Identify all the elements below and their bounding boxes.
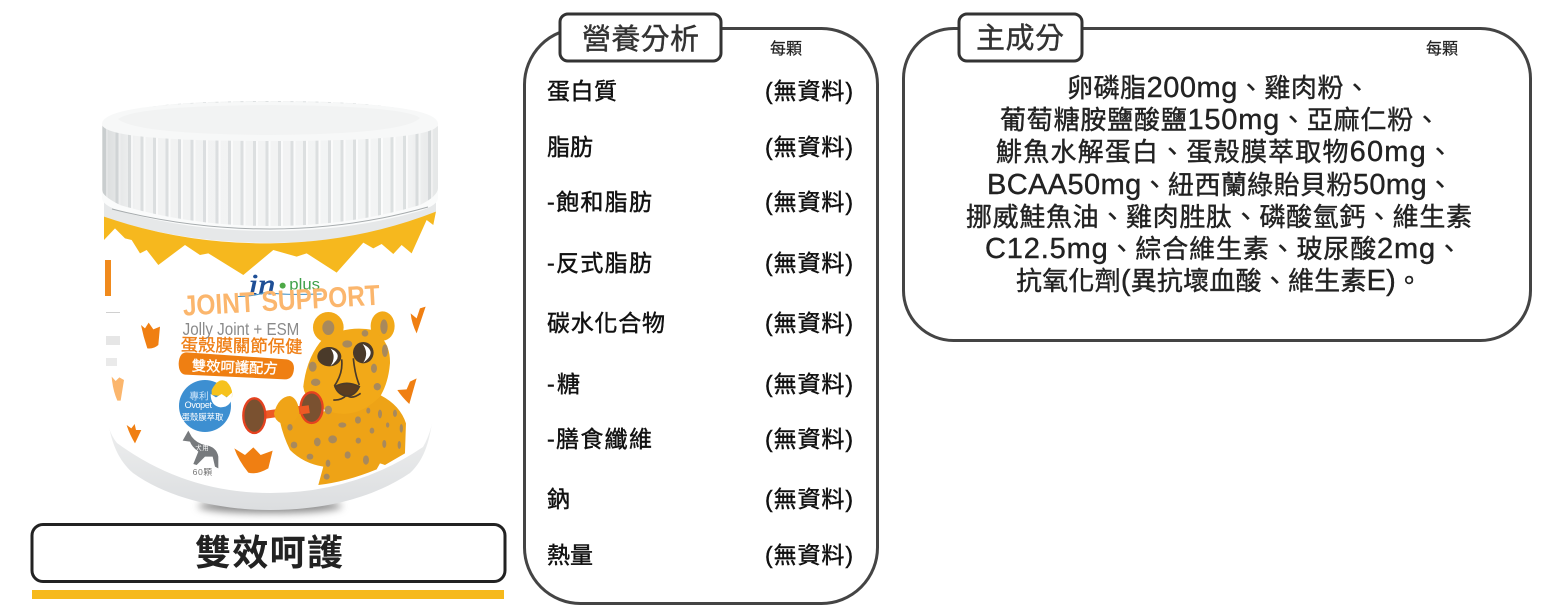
orange crown shapes bbox=[112, 307, 426, 473]
row: protein: 蛋白質 bbox=[547, 78, 617, 104]
dog icon: 犬用 bbox=[195, 443, 209, 452]
leopard hand bbox=[274, 396, 299, 424]
leopard body and arm bbox=[280, 395, 406, 485]
dumbbell bbox=[243, 392, 323, 433]
ingredient list: 挪威鮭魚油、雞肉胜肽、磷酸氫鈣、維生素 bbox=[966, 202, 1472, 232]
row: calories: (無資料) bbox=[765, 542, 853, 568]
patent badge: Ovopet bbox=[185, 400, 212, 410]
panel border bbox=[904, 28, 1530, 340]
ingredient list: 葡萄糖胺鹽酸鹽150mg、亞麻仁粉、 bbox=[1000, 104, 1440, 136]
orange pill bbox=[179, 352, 294, 379]
patent badge: 專利 bbox=[189, 390, 209, 402]
ingredient list bbox=[966, 72, 1472, 297]
row: calories: 熱量 bbox=[547, 542, 593, 568]
ingredient list: BCAA50mg、紐西蘭綠貽貝粉50mg、 bbox=[987, 169, 1453, 201]
jar shadow bbox=[198, 499, 342, 513]
dog icon bbox=[183, 431, 218, 468]
heading box bbox=[32, 524, 505, 582]
subtitle: Jolly Joint + ESM bbox=[183, 319, 299, 339]
row: trans fat: (無資料) bbox=[765, 250, 853, 276]
leopard ears bbox=[313, 311, 395, 343]
row: carbohydrate bbox=[547, 310, 853, 336]
row: sodium bbox=[547, 486, 853, 512]
brand logo bbox=[235, 270, 322, 301]
product name: JOINT SUPPORT bbox=[182, 280, 381, 323]
pack count: 60顆 bbox=[193, 467, 212, 477]
row: protein: (無資料) bbox=[765, 78, 853, 104]
heading: product name bbox=[32, 524, 505, 582]
panel border bbox=[524, 28, 878, 604]
row: saturated fat bbox=[547, 189, 853, 215]
patent badge bbox=[179, 380, 232, 432]
row: fat bbox=[547, 134, 853, 160]
jar base rim bbox=[106, 400, 434, 510]
jar lid bbox=[102, 101, 438, 231]
row: dietary fiber: -膳食纖維 bbox=[547, 426, 652, 452]
leopard mascot bbox=[243, 311, 406, 485]
brand logo: plus bbox=[289, 276, 320, 293]
row: sugar: -糖 bbox=[547, 371, 580, 397]
row: sugar: (無資料) bbox=[765, 371, 853, 397]
jar neck bbox=[104, 200, 436, 243]
row: dietary fiber: (無資料) bbox=[765, 426, 853, 452]
jar body bbox=[104, 215, 436, 493]
leopard eyes bbox=[317, 342, 374, 366]
ingredient list: C12.5mg、綜合維生素、玻尿酸2mg、 bbox=[985, 233, 1462, 265]
row: carbohydrate: (無資料) bbox=[765, 310, 853, 336]
leopard spots bbox=[287, 319, 403, 480]
row: protein bbox=[547, 78, 853, 104]
side label details bbox=[105, 260, 120, 366]
panel tab: main ingredients: 主成分 bbox=[976, 22, 1064, 55]
leopard head bbox=[303, 329, 390, 414]
ingredient list: 抗氧化劑(異抗壞血酸、維生素E)。 bbox=[1016, 265, 1422, 297]
jar label artwork bbox=[112, 270, 426, 485]
row: carbohydrate: 碳水化合物 bbox=[547, 310, 665, 336]
panel tab: nutrition analysis bbox=[560, 14, 721, 61]
panel tab: nutrition analysis: 營養分析 bbox=[582, 23, 699, 56]
yellow underline bar bbox=[32, 590, 504, 599]
row: trans fat bbox=[547, 250, 853, 276]
brand logo: in bbox=[249, 270, 275, 301]
row: sugar bbox=[547, 371, 853, 397]
row: calories bbox=[547, 542, 853, 568]
patent badge: 蛋殼膜萃取 bbox=[182, 412, 224, 422]
row: sodium: 鈉 bbox=[547, 486, 570, 512]
ingredient list: 鯡魚水解蛋白、蛋殼膜萃取物60mg、 bbox=[996, 136, 1453, 168]
row: sodium: (無資料) bbox=[765, 486, 853, 512]
yellow zigzag band bbox=[104, 212, 436, 275]
product jar bbox=[102, 101, 438, 513]
row: saturated fat: (無資料) bbox=[765, 189, 853, 215]
ingredient list: 卵磷脂200mg、雞肉粉、 bbox=[1067, 72, 1370, 104]
row: saturated fat: -飽和脂肪 bbox=[547, 189, 652, 215]
chinese product name: 蛋殼膜關節保健 bbox=[181, 335, 303, 357]
panel: main ingredients bbox=[904, 14, 1530, 340]
row: trans fat: -反式脂肪 bbox=[547, 250, 652, 276]
heading text: 雙效呵護 bbox=[195, 524, 343, 576]
leopard nose and mouth bbox=[333, 358, 361, 400]
row: dietary fiber bbox=[547, 426, 853, 452]
row: fat: (無資料) bbox=[765, 134, 853, 160]
orange pill: 雙效呵護配方 bbox=[192, 358, 278, 378]
panel tab: main ingredients bbox=[959, 14, 1082, 61]
per-piece label: 每顆 bbox=[770, 40, 802, 58]
per-piece label: 每顆 bbox=[1426, 40, 1458, 58]
row: fat: 脂肪 bbox=[547, 134, 593, 160]
panel: nutrition analysis bbox=[524, 14, 878, 604]
